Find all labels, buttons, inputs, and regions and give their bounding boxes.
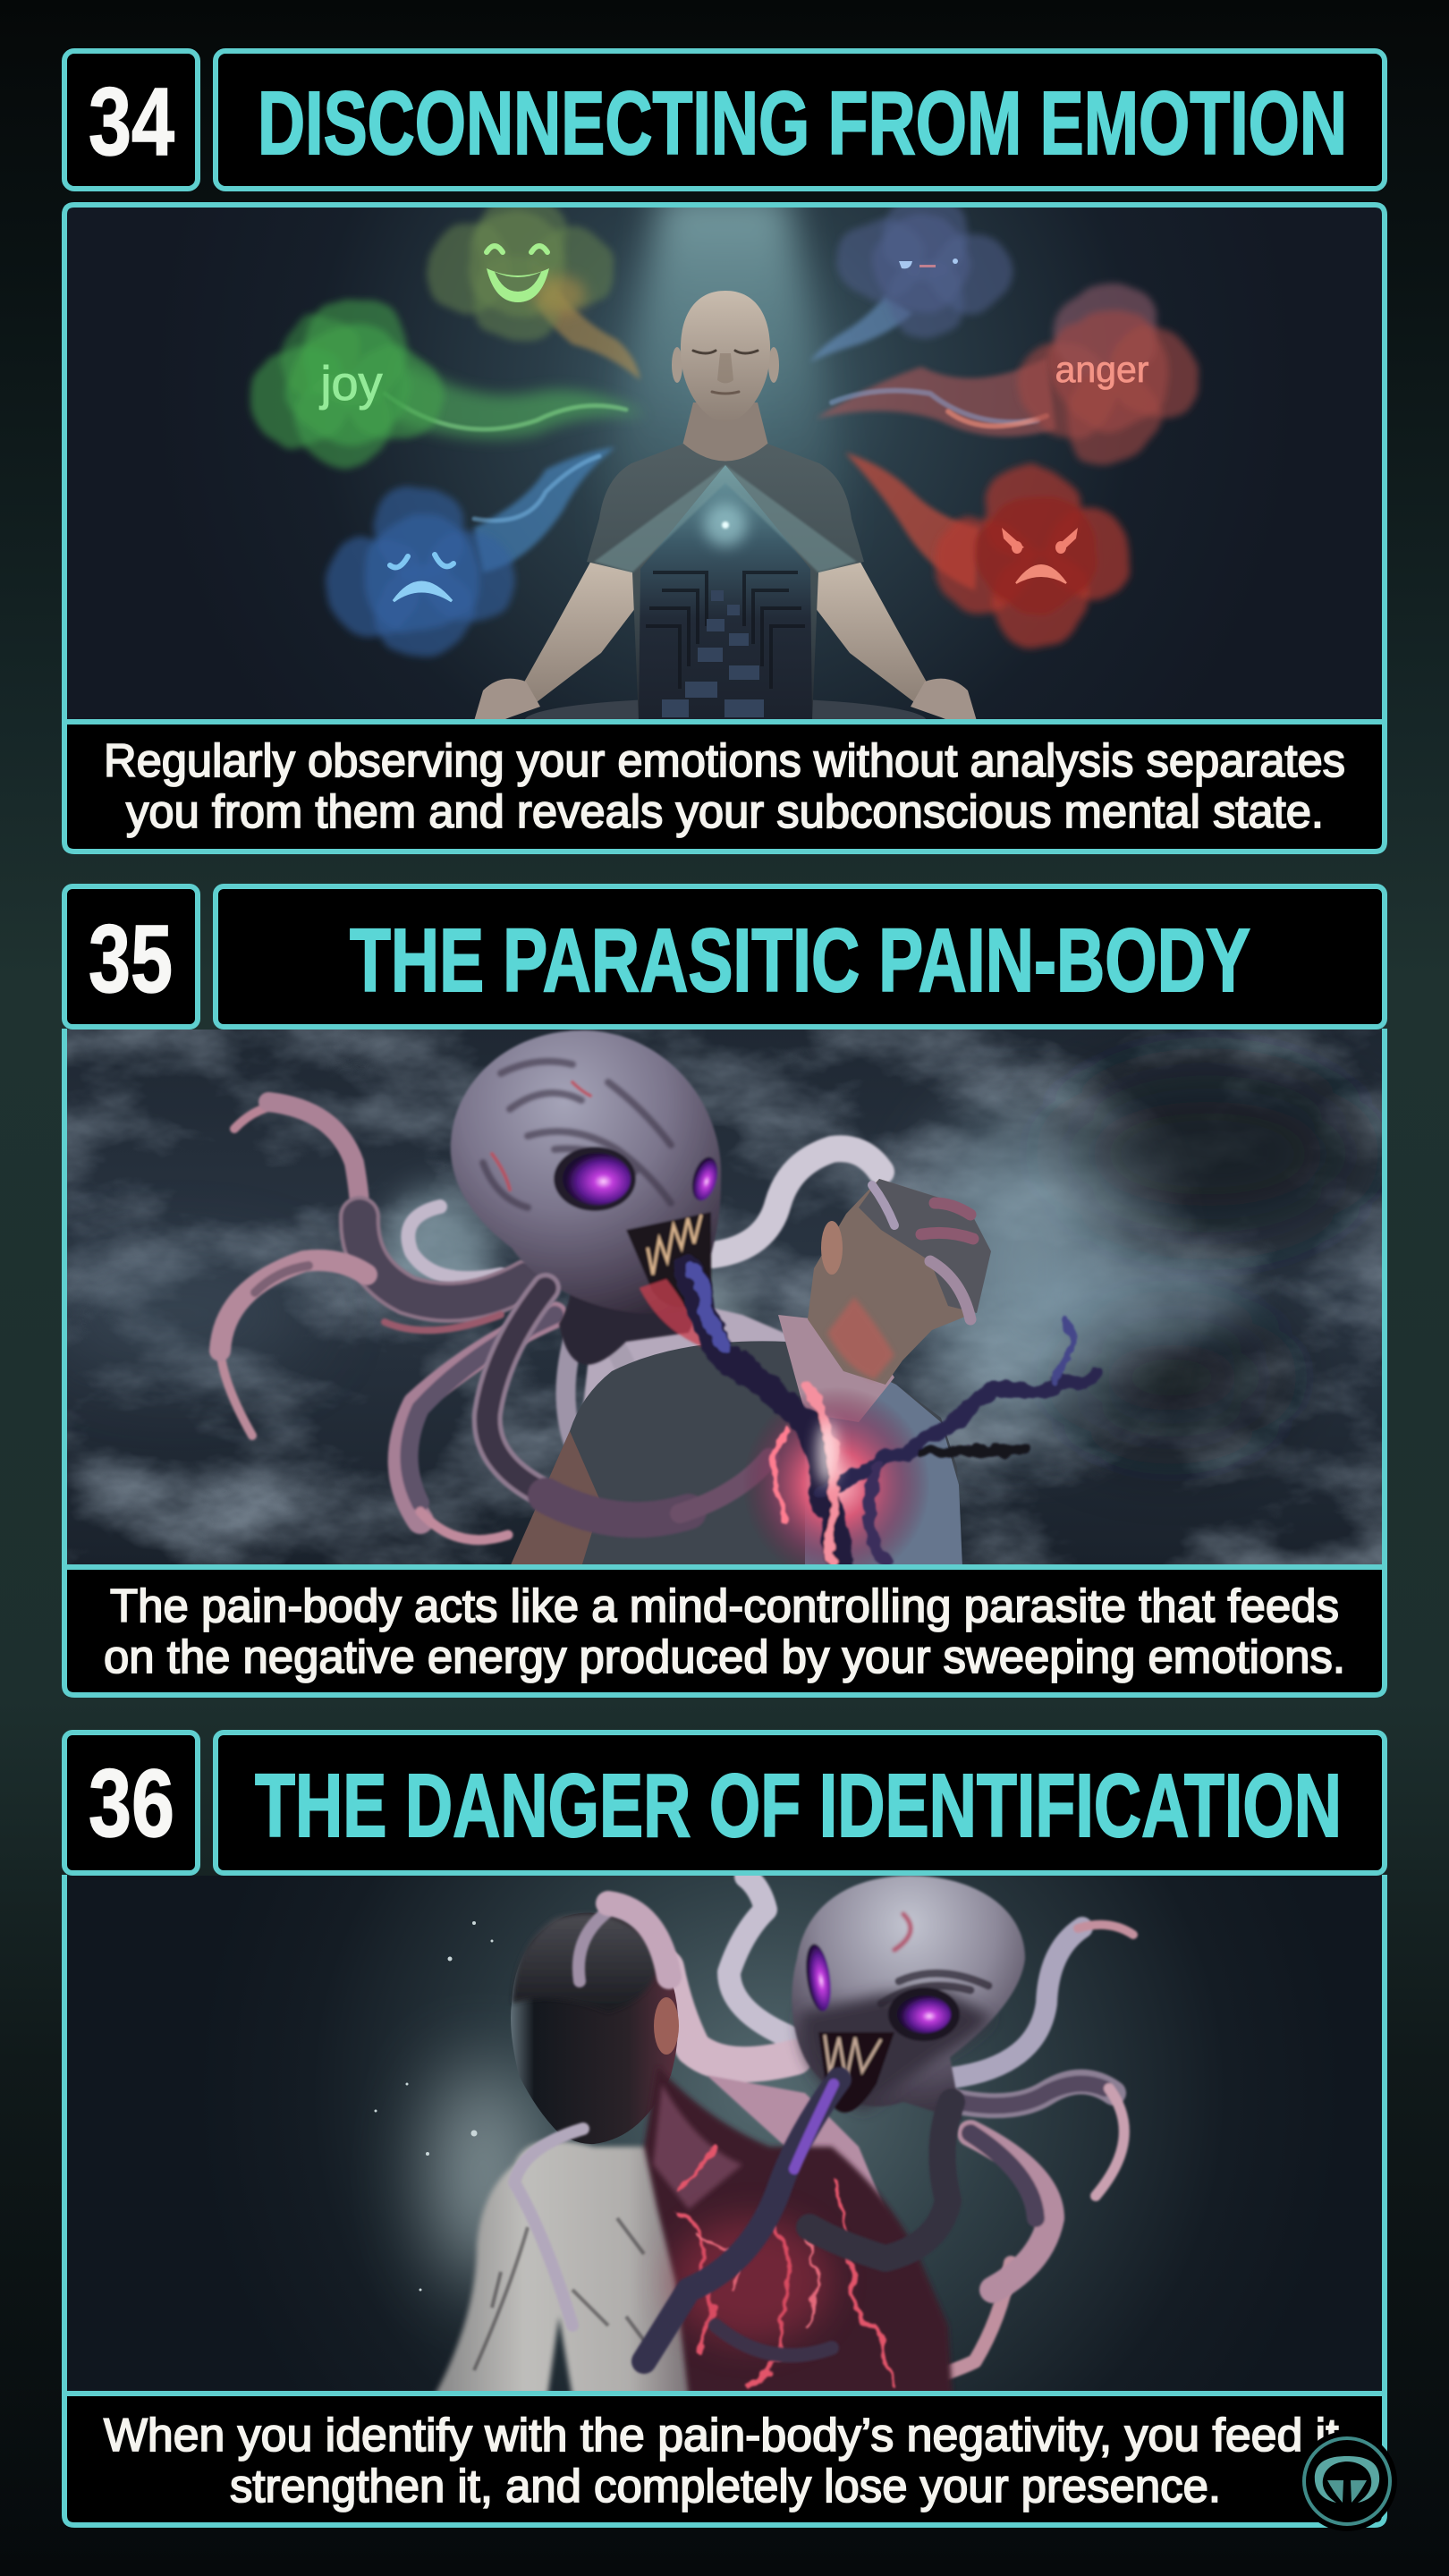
tentacle: lower long — [402, 1315, 555, 1540]
man — [510, 1179, 991, 1567]
caption 36: strengthen it, and completely lose your presence. — [230, 2461, 1221, 2512]
creature head — [451, 1030, 722, 1365]
cloud: sad face — [327, 447, 615, 659]
caption 34 — [64, 722, 1385, 852]
pale tentacles behind — [666, 1877, 1011, 2406]
caption 34: you from them and reveals your subconscious mental state. — [126, 786, 1324, 838]
cloud: angry face — [845, 453, 1134, 646]
cloud: grey-blue face — [809, 194, 1010, 362]
cloud: joy — [250, 297, 646, 469]
number box 34 — [64, 51, 198, 189]
caption 35: on the negative energy produced by your sweeping emotions. — [104, 1631, 1345, 1683]
tongue and dark tentacles — [644, 2080, 952, 2361]
number box 36 — [64, 1733, 198, 1873]
man body — [434, 1913, 707, 2397]
tentacles behind — [408, 1148, 881, 1440]
illustration: man merged with parasite — [64, 1876, 1385, 2406]
cloud: joy: joy — [318, 357, 383, 411]
tentacle on man's head and shoulder — [514, 1903, 669, 2326]
illustration: meditating man with emotion clouds — [64, 192, 1385, 744]
number box 35 — [64, 886, 198, 1027]
tentacles right — [942, 1925, 1133, 2290]
tentacle: upper left hook — [234, 1102, 528, 1330]
caption 34: Regularly observing your emotions without analysis separates — [104, 735, 1345, 787]
caption 36 — [64, 2394, 1385, 2525]
caption 36: When you identify with the pain-body’s negativity, you feed it, — [104, 2410, 1352, 2462]
number box 35: 35 — [89, 904, 173, 1013]
icon: round logo badge — [1297, 2431, 1397, 2531]
meditating man — [474, 291, 977, 744]
panel: 34 disconnecting from emotion — [64, 51, 1385, 852]
cloud: happy face — [425, 195, 640, 380]
caption 35: The pain-body acts like a mind-controlling parasite that feeds — [110, 1580, 1339, 1632]
panel frame 35 — [64, 1029, 1385, 1567]
red veined body — [644, 2066, 953, 2397]
number box 34: 34 — [89, 67, 174, 175]
number box 36: 36 — [89, 1749, 174, 1857]
tentacle: thick front — [487, 1288, 769, 1520]
tentacle: left lower — [220, 1260, 367, 1436]
dust particles — [374, 1921, 494, 2292]
caption 35 — [64, 1567, 1385, 1695]
title 36 — [216, 1733, 1385, 1873]
panel frame 36 — [64, 1875, 1385, 2394]
cloud: anger: anger — [1055, 349, 1148, 390]
title 34 — [216, 51, 1385, 189]
title 35 — [216, 886, 1385, 1027]
panel: 35 the parasitic pain-body — [45, 886, 1385, 1695]
panel frame 34 — [64, 205, 1385, 722]
energy streak and chest burst — [688, 1268, 1093, 1583]
illustration: parasite creature attacking man — [45, 1030, 1385, 1583]
panel: 36 the danger of identification — [64, 1733, 1385, 2525]
creature head — [792, 1876, 1025, 2120]
cloud: anger — [816, 281, 1199, 464]
